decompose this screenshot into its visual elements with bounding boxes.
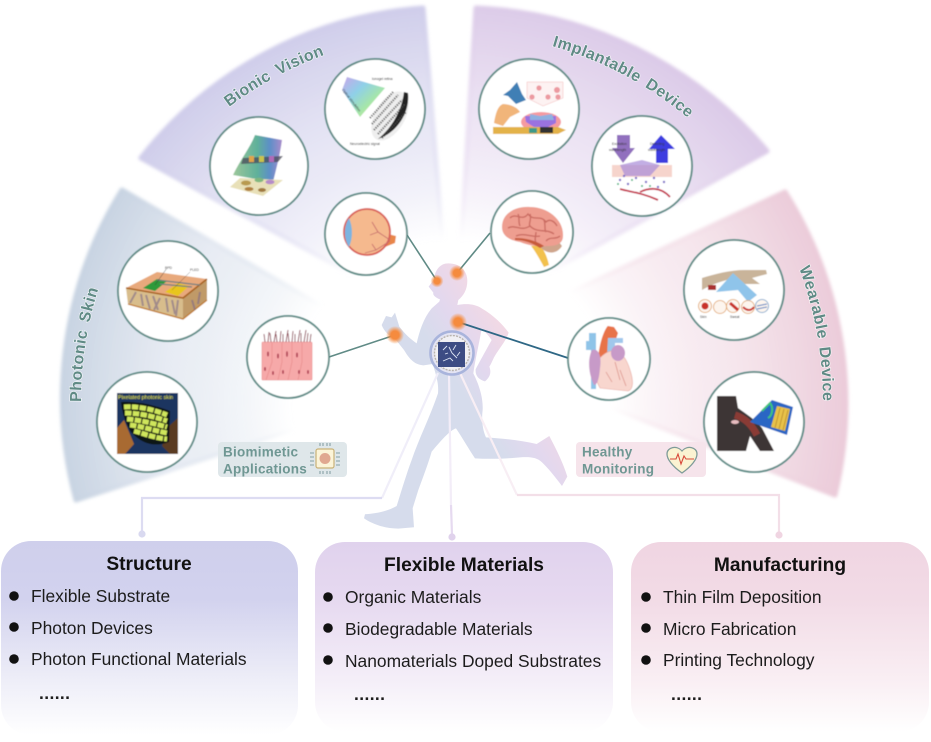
list: Micro Fabrication	[663, 619, 796, 639]
leader line: eye	[407, 235, 437, 281]
circle: heart	[568, 318, 650, 400]
list: ......	[39, 683, 70, 703]
circle: skin device block: PPD	[165, 266, 173, 270]
list: Biodegradable Materials	[345, 619, 533, 639]
list: ......	[671, 684, 702, 704]
circle: wearable hand patch: Skin	[700, 315, 707, 319]
runner silhouette	[364, 263, 567, 529]
heading: Wearable Device: Wearable Device	[800, 264, 835, 401]
list: Printing Technology	[663, 650, 815, 670]
list: ......	[354, 684, 385, 704]
icon: photonic chip at body centre	[430, 332, 474, 374]
circle: skin cells	[247, 316, 329, 398]
circle: optical retina	[325, 59, 425, 159]
label: Biomimetic Applications: Biomimetic	[223, 444, 299, 460]
circle: pixelated photonic skin photo: Pixelated photonic skin	[118, 395, 173, 401]
circle: excitation and detection wavelengths	[592, 116, 692, 216]
list: Photon Devices	[31, 618, 153, 638]
label: Healthy Monitoring: Monitoring	[582, 462, 654, 476]
list: Nanomaterials Doped Substrates	[345, 651, 601, 671]
circle: wearable hand patch: Sweat	[730, 315, 739, 319]
heading: Flexible Materials	[384, 555, 544, 576]
list: Flexible Substrate	[31, 586, 170, 606]
list: Thin Film Deposition	[663, 587, 822, 607]
circle: optical retina: Neuroelectric signal	[350, 142, 380, 146]
panel: photonic skin wedge	[63, 190, 451, 500]
list: Organic Materials	[345, 587, 482, 607]
list	[641, 587, 822, 704]
circle: excitation and detection wavelengths: Detecting	[650, 142, 664, 146]
leader line: brain	[457, 233, 490, 273]
circle: wearable circuit on shoulder	[704, 372, 804, 472]
list	[323, 587, 601, 704]
connector: chip to flexible materials	[448, 373, 456, 541]
circle: excitation and detection wavelengths: Excitation	[612, 142, 627, 146]
panel: Structure	[1, 541, 298, 735]
circle: flexible sheet device	[210, 117, 308, 215]
panel: bionic vision wedge	[141, 8, 451, 330]
heading: Manufacturing	[714, 555, 846, 576]
leader line: heart	[458, 322, 568, 358]
circle: neural probe implant	[479, 59, 579, 159]
heading: Implantable Device: Implantable Device	[552, 35, 692, 117]
list	[9, 586, 247, 703]
heading: Photonic Skin: Photonic Skin	[69, 288, 98, 402]
circle: eye	[325, 193, 407, 275]
circle: optical retina: Optical stimulation	[341, 88, 361, 113]
circle: excitation and detection wavelengths: wavelength	[648, 148, 665, 152]
list: Photon Functional Materials	[31, 649, 247, 669]
heading: Bionic Vision: Bionic Vision	[222, 48, 324, 108]
panel: Manufacturing	[631, 542, 929, 732]
orange points on body	[386, 265, 467, 344]
circle: skin device block: PLED	[190, 268, 199, 272]
icon: brain chip	[310, 443, 340, 474]
circle: wearable hand patch	[684, 240, 784, 340]
leader line: skin	[329, 335, 395, 357]
icon: heart with pulse	[667, 447, 697, 473]
label: Biomimetic Applications: Applications	[223, 462, 307, 476]
circle: skin device block	[118, 241, 218, 341]
label: Biomimetic Applications	[218, 442, 347, 477]
panel: implantable device wedge	[455, 8, 767, 325]
label: Healthy Monitoring	[576, 442, 706, 477]
circle: brain	[491, 191, 573, 273]
circle: optical retina: Ionogel retina	[372, 77, 393, 81]
connector: chip to manufacturing	[460, 373, 783, 539]
circle: pixelated photonic skin photo	[97, 372, 197, 472]
circle: excitation and detection wavelengths: wavelength	[609, 148, 626, 152]
connector: chip to structure	[138, 373, 438, 538]
panel: Flexible Materials	[315, 542, 613, 732]
heading: Structure	[106, 554, 192, 575]
panel: wearable device wedge	[451, 192, 846, 495]
label: Healthy Monitoring: Healthy	[582, 444, 633, 460]
